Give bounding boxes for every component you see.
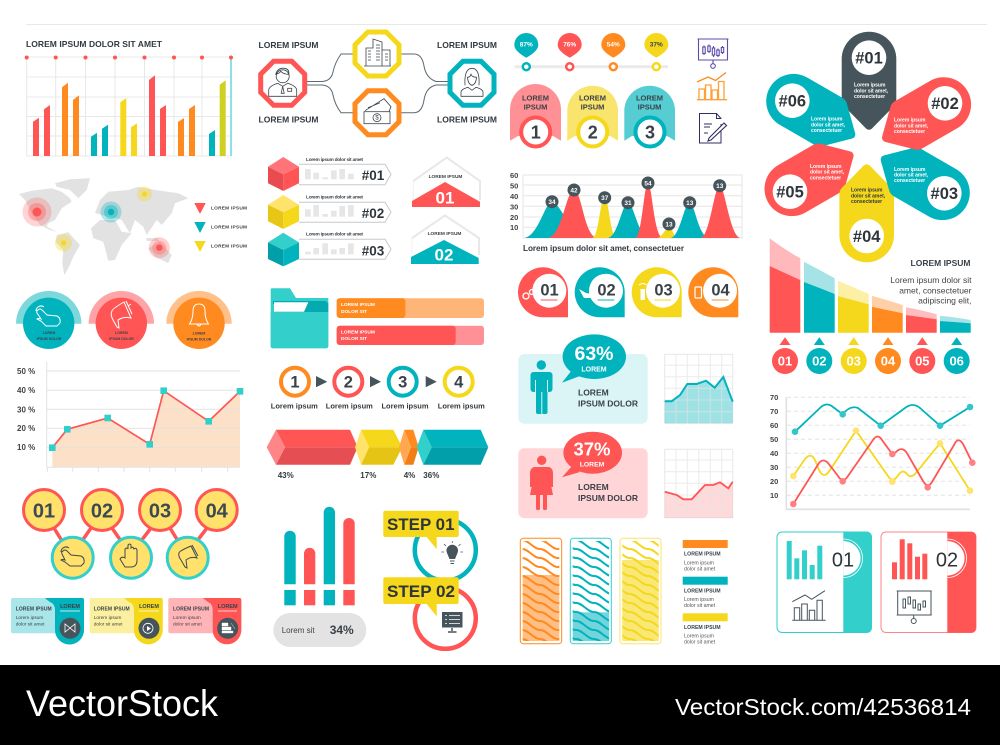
small card yellow: LOREM: [139, 604, 159, 610]
line chart with percentages: 40 %: [17, 386, 35, 395]
peak area chart: 10: [510, 223, 518, 232]
numbered connected circles 01-04: 04: [206, 500, 229, 522]
callout card 63% male: [518, 334, 648, 424]
house tag 02: LOREM IPSUM: [428, 231, 461, 237]
petal #04: dolor sit amet,: [851, 194, 886, 200]
tab 2: LOREM: [579, 93, 606, 102]
tab 1: 1: [531, 122, 541, 142]
line chart with percentages: 50 %: [17, 367, 35, 376]
wavy fill bars: [520, 538, 661, 644]
row 03: Lorem ipsum dolor sit amet: [306, 232, 363, 238]
numbered connected circles 01-04: [24, 490, 237, 578]
marker: south america: [55, 234, 72, 252]
small card red: LOREM IPSUM: [173, 607, 209, 613]
step 01: STEP 01: [387, 515, 454, 534]
network of four octagons: [258, 32, 497, 135]
percentage pin timeline: [514, 33, 668, 70]
wavy bars legend: Lorem ipsum: [684, 597, 714, 603]
four step process: Lorem ipsum: [271, 402, 318, 410]
mini area chart teal: [665, 354, 733, 423]
small card red: LOREM: [218, 604, 238, 610]
multi-line chart: 20: [770, 477, 778, 486]
badge 02 hand: [575, 267, 625, 317]
tab 3: 3: [645, 122, 655, 142]
small card teal: dolor sit amet: [16, 621, 45, 627]
small card yellow: [90, 598, 163, 644]
tab 2: 2: [588, 122, 598, 142]
map legend: [194, 203, 247, 252]
map legend: LOREM IPSUM: [211, 244, 247, 250]
labels: LOREM IPSUM: [258, 114, 318, 124]
half-circle badge: bell: IPSUM DOLOR: [187, 337, 212, 341]
multi-line chart: 60: [770, 421, 778, 430]
tab 3: IPSUM: [638, 102, 661, 111]
yellow bar: [620, 538, 661, 644]
peak area chart: 13: [686, 200, 694, 207]
small card red: Lorem ipsum: [173, 615, 201, 621]
petal #05: consectetuer: [810, 175, 841, 181]
pin 37%: 37%: [650, 42, 663, 48]
petal #01: #01: [855, 50, 883, 68]
petal #06: [756, 64, 868, 160]
multi-line chart: 30: [770, 463, 778, 472]
row 03: #03: [362, 244, 385, 258]
labels: LOREM IPSUM: [258, 40, 318, 50]
four step process: 4: [454, 374, 464, 392]
peak area chart: 20: [510, 213, 518, 222]
side text: amet, consectetuer: [899, 285, 972, 295]
house tag 01: LOREM IPSUM: [429, 174, 462, 180]
petal #02: Lorem ipsum: [894, 118, 926, 124]
small card yellow: Lorem ipsum: [94, 615, 121, 621]
3D segmented bar: 17%: [360, 471, 376, 480]
line chart with percentages: 10 %: [17, 443, 35, 452]
numbered connected circles 01-04: 03: [149, 500, 171, 522]
icon: folder: [271, 288, 328, 348]
callout card 37% female: IPSUM DOLOR: [578, 493, 638, 503]
side text: LOREM IPSUM: [911, 258, 970, 268]
progress bar red: LOREM IPSUM: [341, 329, 375, 335]
row 03: [268, 232, 391, 266]
peak area chart: 30: [510, 202, 518, 212]
tab 2: [567, 86, 618, 146]
multi-line chart: 40: [770, 449, 778, 458]
orange bar: [520, 538, 562, 644]
callout card 37% female: 37%: [573, 439, 611, 460]
multi-line chart: [770, 393, 976, 509]
peak area chart: 40: [510, 192, 518, 201]
line chart with percentages: 20 %: [17, 424, 35, 433]
half-circle badge: megaphone: LOREM: [115, 331, 128, 335]
icon: man figure: [530, 360, 552, 414]
card 01: [777, 532, 872, 633]
3D segmented bar: 36%: [423, 471, 439, 480]
house tag 01: [412, 158, 480, 208]
petal #01: [842, 32, 896, 130]
petal #04: consectetuer: [851, 199, 882, 205]
step 02: STEP 02: [387, 582, 455, 601]
progress bar orange: LOREM IPSUM: [341, 302, 375, 308]
half-circle badge: megaphone: IPSUM DOLOR: [109, 337, 134, 341]
petal #06: dolor sit amet,: [811, 122, 846, 128]
octagon: money: [355, 91, 399, 135]
watermark footer band: VectorStock: [26, 683, 218, 724]
octagon: woman: [450, 61, 494, 105]
3D segmented bar: 4%: [404, 471, 415, 480]
badge 03 remote: [632, 267, 682, 317]
petal #01: dolor sit amet,: [854, 88, 889, 94]
octagon: buildings: [355, 32, 399, 76]
badge 04 phone: 04: [711, 282, 730, 300]
wavy bars legend: dolor sit amet: [684, 640, 716, 646]
multi-line chart: 10: [770, 491, 778, 500]
petal #01: consectetuer: [854, 94, 885, 100]
numbered circles: 03: [846, 354, 861, 369]
labels: [258, 40, 497, 124]
peak area chart: 13: [716, 183, 724, 190]
numbered circles: 05: [915, 354, 930, 369]
rounded bar chart with pill: [273, 507, 366, 647]
step 01: [383, 511, 476, 580]
side text: adipiscing elit,: [918, 296, 972, 306]
petal #03: [868, 134, 980, 230]
pill label: 34%: [330, 623, 354, 637]
callout card 63% male: IPSUM DOLOR: [578, 398, 638, 408]
line chart with percentages: 30 %: [17, 406, 35, 414]
half-circle badge: bell: LOREM: [193, 332, 205, 336]
petal #06: Lorem ipsum: [811, 117, 843, 123]
pin 76%: [558, 33, 582, 70]
half-circle badge: megaphone: [89, 291, 154, 349]
peak area chart: 37: [601, 195, 609, 202]
tab 1: LOREM: [522, 93, 549, 102]
petal #03: consectetuer: [894, 178, 925, 184]
icon: pointing hand: [61, 547, 84, 566]
petal #04: Lorem ipsum: [851, 188, 883, 194]
icon: woman figure: [530, 456, 553, 510]
row 01: Lorem ipsum dolor sit amet: [306, 157, 363, 163]
petal #01: Lorem ipsum: [854, 82, 886, 88]
four step process: 1: [290, 374, 300, 392]
pill label: Lorem sit: [282, 626, 315, 635]
wavy bars legend: LOREM IPSUM: [684, 552, 721, 558]
pin 54%: 54%: [607, 42, 620, 48]
petal #04: #04: [853, 228, 881, 246]
cube list: [268, 157, 391, 266]
peak area chart: 31: [624, 200, 632, 207]
pin 76%: 76%: [563, 42, 576, 48]
row 02: #02: [362, 206, 384, 221]
3D segmented bar: 43%: [278, 471, 294, 480]
house tag 02: [411, 216, 479, 264]
tab 3: LOREM: [636, 93, 663, 102]
progress bar red: [337, 326, 484, 345]
numbered circles: 02: [812, 354, 827, 369]
watermark footer band: VectorStock.com/42536814: [675, 694, 971, 720]
progress bar red: DOLOR SIT: [341, 336, 367, 342]
icon: presentation candles: [897, 591, 932, 624]
house tag 02: 02: [435, 246, 453, 264]
small card yellow: LOREM IPSUM: [94, 607, 130, 613]
numbered connected circles 01-04: 02: [91, 500, 113, 522]
marker: north america: [22, 198, 52, 226]
multi-line chart: 70: [770, 407, 778, 416]
four step process: 2: [344, 374, 353, 392]
wavy bars legend: LOREM IPSUM: [684, 588, 721, 594]
half-circle badge: hand: LOREM: [43, 331, 55, 335]
wavy bars legend: LOREM IPSUM: [684, 625, 721, 631]
four step process: Lorem ipsum: [326, 402, 373, 410]
petal #02: dolor sit amet,: [894, 124, 929, 130]
teal bar: [570, 538, 611, 644]
peak area chart: 34: [548, 199, 556, 206]
marker: australia: [149, 237, 170, 258]
badge 01 gears: 01: [540, 282, 559, 300]
map legend: LOREM IPSUM: [211, 206, 247, 212]
small card teal: Lorem ipsum: [16, 615, 43, 621]
petal #02: [869, 67, 981, 164]
mini area chart red: [665, 449, 733, 518]
icon: document and pen: [700, 114, 726, 143]
3D segmented bar: [267, 430, 488, 480]
half-circle badge: hand: [16, 291, 81, 349]
icon: megaphone: [179, 545, 198, 568]
wavy bars legend: Lorem ipsum: [684, 560, 714, 566]
tab 2: IPSUM: [581, 102, 604, 111]
peak area chart: 42: [570, 187, 578, 194]
progress bar orange: DOLOR SIT: [341, 309, 367, 315]
icon: presentation board: [698, 39, 728, 68]
small card red: dolor sit amet: [173, 621, 202, 627]
petal #02: #02: [931, 95, 959, 113]
callout card 63% male: LOREM: [581, 367, 607, 374]
pin 87%: 87%: [520, 42, 533, 48]
numbered circles: [772, 348, 970, 374]
half-circle badge: bell: [166, 291, 232, 349]
icon: light bulb: [442, 541, 463, 564]
wavy bars legend: Lorem ipsum: [684, 634, 714, 640]
world map with location markers: [19, 178, 247, 275]
bar chart: lorem ipsum dolor sit amet: [25, 39, 233, 156]
wavy bars legend: dolor sit amet: [684, 566, 716, 572]
pin 54%: [601, 33, 625, 70]
petal #06: consectetuer: [811, 128, 842, 134]
petal #04: [839, 164, 894, 262]
callout card 63% male: 63%: [574, 343, 614, 365]
petal #03: dolor sit amet,: [894, 173, 929, 179]
peak area chart: 54: [644, 180, 652, 187]
six petal diagram: [755, 32, 981, 262]
pin 37%: [644, 33, 668, 70]
tab 1: IPSUM: [524, 102, 547, 111]
progress bar orange: [337, 298, 484, 318]
four step process: Lorem ipsum: [438, 402, 485, 410]
labels: LOREM IPSUM: [437, 114, 497, 124]
callout card 37% female: LOREM: [580, 462, 605, 469]
folder with progress bars: [271, 288, 484, 348]
side text: [890, 258, 972, 306]
peak area chart: 13: [665, 221, 673, 228]
wavy bars legend: dolor sit amet: [684, 603, 716, 609]
card 02: [881, 532, 976, 633]
row 01: [268, 157, 391, 191]
icon: trend chart: [792, 591, 826, 620]
four step process: Lorem ipsum: [381, 402, 429, 410]
watermark footer band: [0, 665, 1000, 745]
line chart with percentages: [17, 362, 243, 472]
petal #05: #05: [776, 184, 804, 202]
small card teal: LOREM IPSUM: [16, 607, 52, 613]
small card yellow: dolor sit amet: [94, 621, 123, 627]
petal #03: Lorem ipsum: [894, 167, 926, 173]
badge 03 remote: 03: [654, 282, 673, 300]
petal #02: consectetuer: [894, 129, 925, 135]
wavy bars legend: [683, 540, 728, 646]
small card teal: [11, 598, 84, 644]
numbered connected circles 01-04: 01: [33, 500, 55, 522]
row 01: #01: [362, 168, 385, 183]
octagon: money: $: [375, 116, 379, 122]
badge 02 hand: 02: [597, 282, 616, 300]
petal #06: #06: [779, 92, 806, 110]
house tag 01: 01: [436, 188, 454, 208]
icon: checklist monitor: [442, 612, 462, 632]
icon: open hand: [120, 544, 137, 567]
peak area chart: Lorem ipsum dolor sit amet, consectetuer: [523, 244, 685, 253]
card 01: 01: [832, 550, 854, 572]
map legend: LOREM IPSUM: [211, 224, 247, 230]
numbered circles: 04: [881, 354, 896, 369]
octagon: man: [261, 61, 305, 105]
four step process: 3: [398, 374, 407, 392]
petal #05: dolor sit amet,: [810, 170, 845, 176]
numbered circles: 06: [949, 354, 964, 369]
half-circle badge: hand: IPSUM DOLOR: [37, 337, 62, 341]
petal #05: [755, 130, 867, 226]
badge 04 phone: [688, 267, 738, 317]
marker: russia: [137, 186, 152, 202]
callout card 37% female: LOREM: [578, 482, 609, 492]
four step process: [271, 368, 485, 410]
side text: Lorem ipsum dolor sit: [890, 275, 972, 285]
labels: LOREM IPSUM: [437, 40, 497, 50]
multi-line chart: 70: [770, 393, 778, 402]
small card teal: LOREM: [60, 604, 80, 610]
tab 3: [624, 86, 675, 146]
icon: orange bar and trend chart: [697, 72, 727, 100]
peak area chart: 60: [510, 171, 518, 180]
callout card 63% male: LOREM: [578, 388, 609, 398]
peak area chart: [510, 171, 742, 253]
row 02: [268, 194, 391, 229]
marker: europe: [100, 202, 122, 222]
numbered circles: 01: [778, 354, 792, 369]
callout card 37% female: [518, 432, 648, 518]
pill label: [273, 613, 366, 647]
badge 01 gears: [518, 267, 568, 317]
card 02: 02: [936, 550, 958, 572]
pin 87%: [514, 33, 538, 70]
petal #05: Lorem ipsum: [810, 164, 842, 170]
declining area bars 01-06: [770, 238, 972, 374]
row 02: Lorem ipsum dolor sit amet: [306, 194, 363, 200]
tab 1: [510, 84, 561, 146]
multi-line chart: 50: [770, 435, 778, 444]
small card red: [168, 598, 241, 644]
peak area chart: 50: [510, 182, 518, 190]
petal #03: #03: [931, 185, 958, 203]
step 02: [383, 577, 476, 649]
chart title: LOREM IPSUM DOLOR SIT AMET: [26, 39, 163, 49]
